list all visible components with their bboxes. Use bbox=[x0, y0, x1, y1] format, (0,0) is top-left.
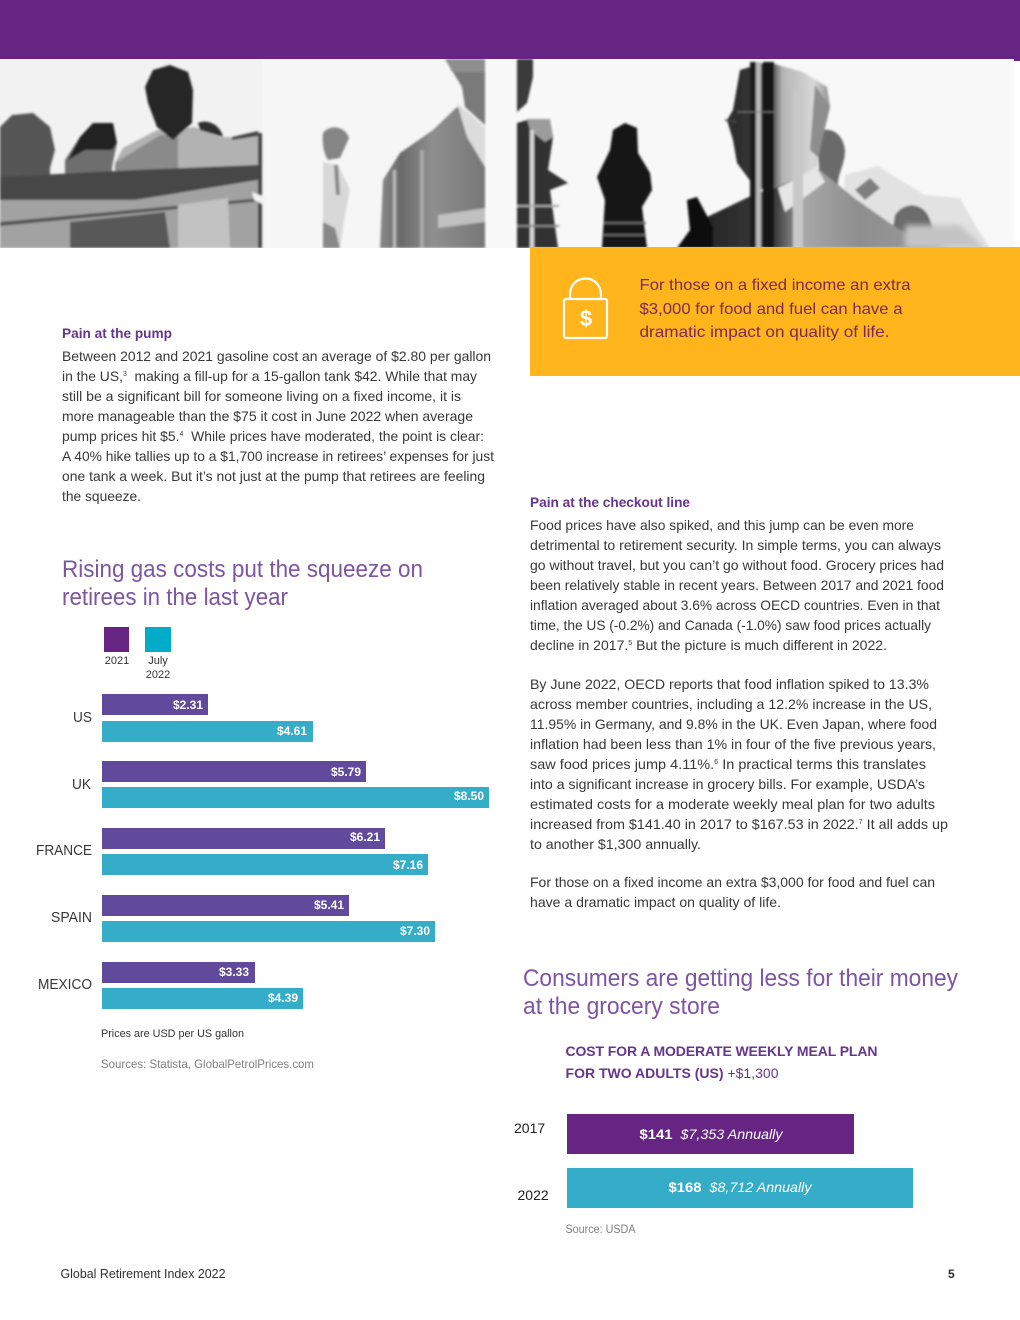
body text: pain at the checkout line: estimated costs for a moderate weekly meal plan for two adults bbox=[530, 796, 935, 812]
bars: UK bbox=[72, 761, 489, 808]
body text: pain at the pump: While prices have moderated, the point is clear: bbox=[183, 428, 484, 444]
body text: pain at the checkout line: go without travel, but you can’t go without food. Grocery prices had bbox=[530, 557, 944, 573]
man in suit bbox=[380, 107, 485, 248]
body text: pain at the checkout line: into a significant increase in grocery bills. For example, USDA’s bbox=[530, 776, 925, 792]
body text: pain at the checkout line: But the picture is much different in 2022. bbox=[632, 637, 887, 653]
body text: pain at the checkout line: detrimental to retirement security. In simple terms, you can always bbox=[530, 537, 941, 553]
callout: yellow quote box bbox=[530, 247, 1020, 376]
section: pain at the checkout line bbox=[530, 494, 948, 910]
callout text: For those on a fixed income an extra bbox=[640, 277, 911, 294]
header band bbox=[0, 0, 1020, 61]
body text: pain at the pump: A 40% hike tallies up to a $1,700 increase in retirees’ expenses for just bbox=[62, 448, 494, 464]
bars: UK: UK bbox=[72, 776, 91, 793]
bar: 2017 bbox=[514, 1114, 854, 1154]
body text: pain at the checkout line: 6 bbox=[714, 759, 718, 766]
legend: 2021 bbox=[105, 655, 129, 667]
body text: pain at the checkout line: For those on a fixed income an extra $3,000 for food and fuel can bbox=[530, 874, 935, 890]
icon: padlock with dollar sign bbox=[564, 278, 607, 338]
body text: pain at the pump: one tank a week. But it’s not just at the pump that retirees are feeling bbox=[62, 468, 485, 484]
bars: US bbox=[73, 694, 313, 742]
chart note: Prices are USD per US gallon bbox=[101, 1028, 244, 1040]
chart title: rising gas costs: Rising gas costs put the squeeze on bbox=[62, 556, 423, 583]
bar: 2022: 2022 bbox=[518, 1187, 549, 1203]
bars: Spain bbox=[51, 895, 435, 942]
chart title: consumers getting less: Consumers are getting less for their money bbox=[523, 965, 958, 992]
heading: pain at the checkout line: Pain at the checkout line bbox=[530, 494, 690, 510]
body text: pain at the pump: making a fill-up for a 15-gallon tank $42. While that may bbox=[127, 368, 477, 384]
bars: Mexico: $4.39 bbox=[268, 991, 298, 1005]
meal plan chart heading: COST FOR A MODERATE WEEKLY MEAL PLAN bbox=[566, 1043, 878, 1059]
body text: pain at the checkout line: inflation averaged about 3.6% across OECD countries. Even in that bbox=[530, 597, 940, 613]
bars: Mexico: $3.33 bbox=[219, 965, 249, 979]
bars: US: US bbox=[73, 709, 92, 726]
footer: page number: 5 bbox=[948, 1267, 955, 1281]
meal plan chart heading bbox=[566, 1043, 878, 1081]
callout text: dramatic impact on quality of life. bbox=[640, 324, 890, 341]
body text: pain at the checkout line: time, the US (-0.2%) and Canada (-1.0%) saw food prices actually bbox=[530, 617, 931, 633]
bar chart: gas prices by country bbox=[36, 694, 489, 1009]
body text: pain at the checkout line: It all adds up bbox=[863, 816, 948, 832]
body text: pain at the checkout line: Food prices have also spiked, and this jump can be even more bbox=[530, 517, 914, 533]
bar: 2017: $7,353 Annually bbox=[679, 1126, 784, 1142]
bars: US: $2.31 bbox=[173, 698, 203, 712]
bars: Spain: $7.30 bbox=[400, 924, 430, 938]
chart title: rising gas costs: retirees in the last year bbox=[62, 584, 288, 611]
photo: silhouettes of business people bbox=[0, 59, 1014, 248]
left group of people bbox=[115, 126, 258, 190]
small distant person bbox=[323, 127, 349, 160]
callout text: $3,000 for food and fuel can have a bbox=[640, 301, 903, 318]
bar: 2017: $141 bbox=[640, 1126, 673, 1142]
body text: pain at the checkout line: 7 bbox=[859, 819, 863, 826]
woman silhouette bbox=[597, 123, 652, 248]
body text: pain at the pump: more manageable than the $75 it cost in June 2022 when average bbox=[62, 408, 473, 424]
body text: pain at the pump: 4 bbox=[179, 431, 183, 438]
heading: pain at the pump: Pain at the pump bbox=[62, 325, 172, 341]
chart sources: Sources: Statista, GlobalPetrolPrices.com bbox=[101, 1057, 314, 1071]
meal plan chart heading: FOR TWO ADULTS (US) +$1,300 bbox=[566, 1065, 779, 1081]
body text: pain at the checkout line: to another $1,300 annually. bbox=[530, 836, 701, 852]
body text: pain at the pump: 3 bbox=[123, 371, 127, 378]
bar chart: weekly meal plan cost bbox=[514, 1114, 913, 1208]
large man profile bbox=[817, 130, 845, 185]
bar: 2022: $168 bbox=[668, 1179, 702, 1195]
section: pain at the pump bbox=[62, 325, 494, 504]
chart title: consumers getting less bbox=[523, 965, 958, 1020]
body text: pain at the pump bbox=[62, 348, 494, 504]
bar: 2022 bbox=[518, 1168, 913, 1208]
body text: pain at the checkout line bbox=[530, 517, 948, 910]
body text: pain at the pump: still be a significant bill for someone living on a fixed income, it is bbox=[62, 388, 461, 404]
chart title: consumers getting less: at the grocery store bbox=[523, 993, 720, 1020]
bar: 2017: 2017 bbox=[514, 1120, 545, 1136]
body text: pain at the checkout line: inflation had been less than 1% in four of the five previous years, bbox=[530, 736, 936, 752]
dark profile and second person bbox=[517, 59, 533, 112]
bars: France: FRANCE bbox=[36, 842, 92, 859]
legend: 2022 bbox=[146, 669, 170, 681]
body text: pain at the checkout line: increased from $141.40 in 2017 to $167.53 in 2022. bbox=[530, 816, 851, 832]
body text: pain at the checkout line: across member countries, including a 12.2% increase in the US, bbox=[530, 696, 932, 712]
callout text bbox=[640, 277, 911, 341]
body text: pain at the pump: the squeeze. bbox=[62, 488, 141, 504]
bars: UK: $5.79 bbox=[331, 765, 361, 779]
body text: pain at the checkout line: have a dramatic impact on quality of life. bbox=[530, 894, 781, 910]
footer: publication name: Global Retirement Index 2022 bbox=[60, 1266, 226, 1281]
bars: Mexico bbox=[38, 962, 303, 1009]
body text: pain at the checkout line: In practical terms this translates bbox=[718, 756, 926, 772]
body text: pain at the checkout line: By June 2022, OECD reports that food inflation spiked to 13.3% bbox=[530, 676, 929, 692]
icon: padlock with dollar sign: $ bbox=[580, 306, 592, 331]
body text: pain at the checkout line: 5 bbox=[628, 640, 632, 647]
body text: pain at the checkout line: 11.95% in Germany, and 9.8% in the UK. Even Japan, where food bbox=[530, 716, 937, 732]
body text: pain at the checkout line: been relatively stable in recent years. Between 2017 and 2021 food bbox=[530, 577, 944, 593]
bars: Mexico: MEXICO bbox=[38, 976, 92, 993]
source: USDA: Source: USDA bbox=[566, 1222, 636, 1236]
bars: Spain: $5.41 bbox=[314, 898, 344, 912]
bars: US: $4.61 bbox=[277, 724, 307, 738]
body text: pain at the pump: in the US, bbox=[62, 368, 123, 384]
body text: pain at the pump: pump prices hit $5. bbox=[62, 428, 180, 444]
legend: July bbox=[148, 655, 168, 667]
body text: pain at the checkout line: saw food prices jump 4.11%. bbox=[530, 756, 708, 772]
bars: France: $6.21 bbox=[350, 830, 380, 844]
bars: France bbox=[36, 828, 428, 875]
chart title: rising gas costs bbox=[62, 556, 423, 611]
bars: Spain: SPAIN bbox=[51, 909, 92, 926]
bar: 2022: $8,712 Annually bbox=[708, 1179, 813, 1195]
body text: pain at the pump: Between 2012 and 2021 gasoline cost an average of $2.80 per gallon bbox=[62, 348, 491, 364]
bars: France: $7.16 bbox=[393, 858, 423, 872]
body text: pain at the checkout line: decline in 2017. bbox=[530, 637, 628, 653]
bars: UK: $8.50 bbox=[454, 789, 484, 803]
legend bbox=[104, 627, 171, 681]
